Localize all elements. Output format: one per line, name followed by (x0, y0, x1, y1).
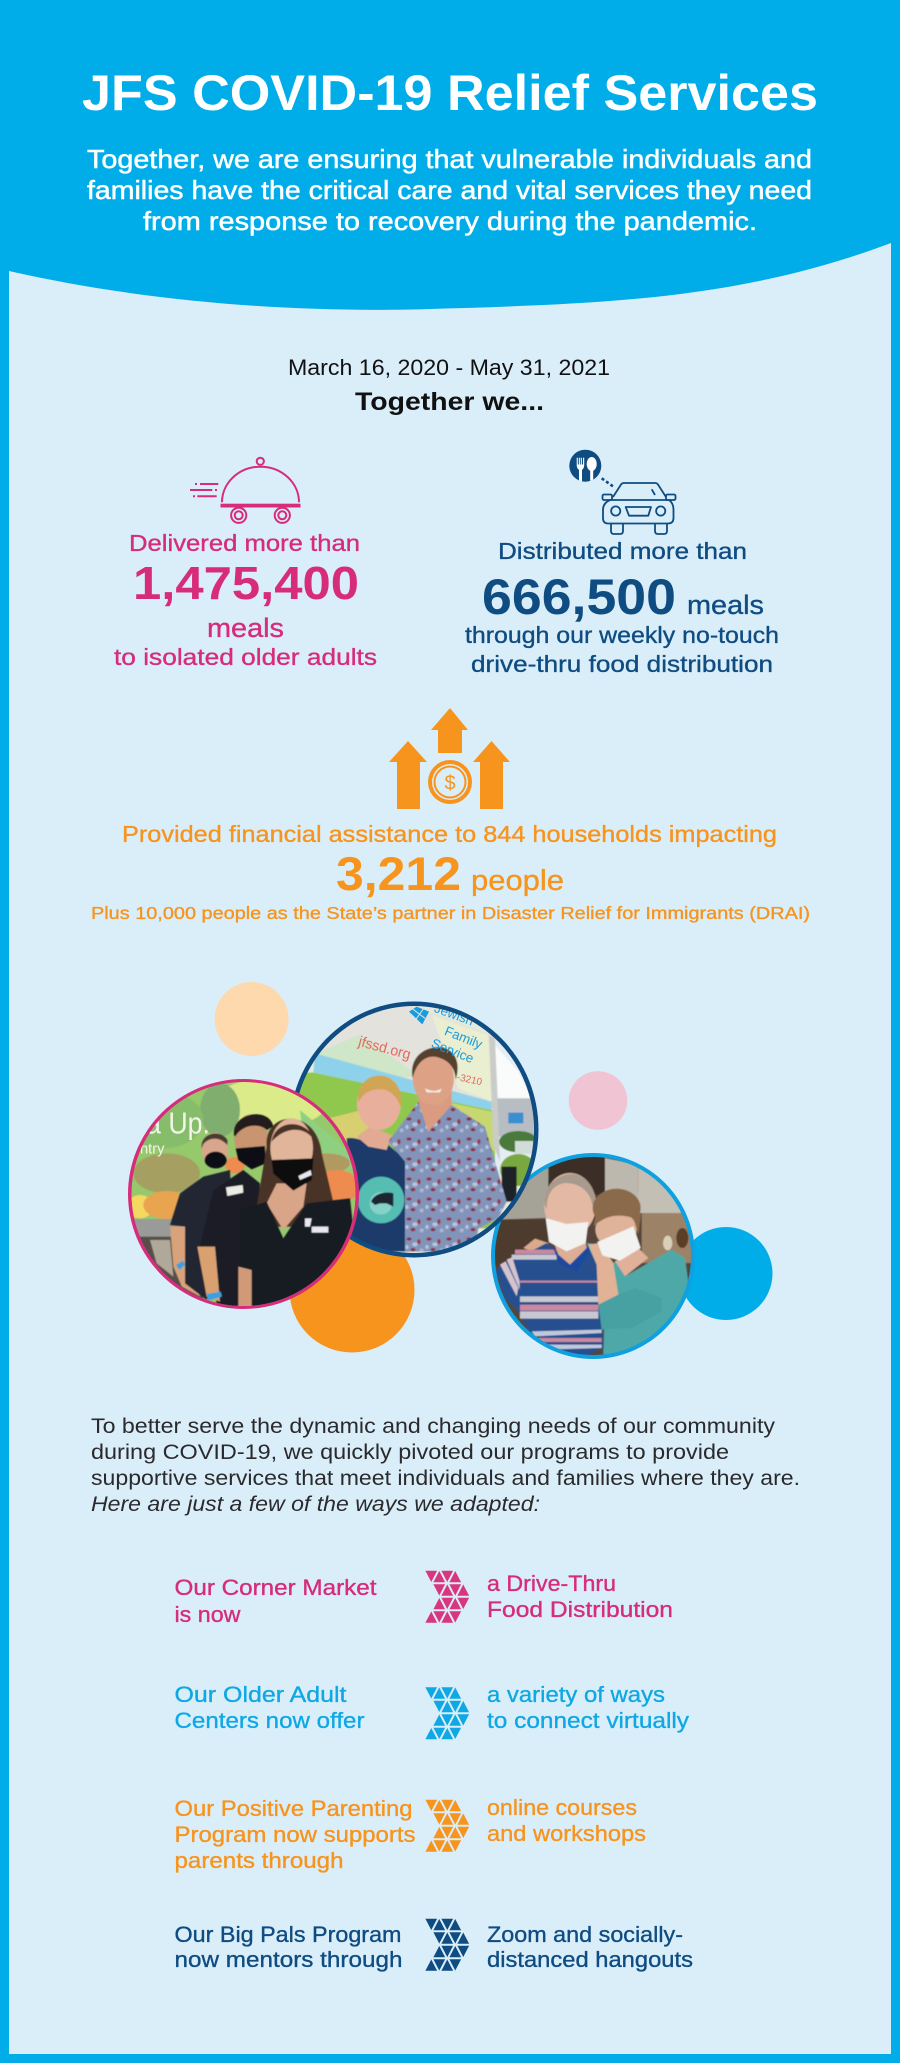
photo: boy and man at sign: Family (443, 1023, 485, 1052)
row: corner market: is now (174, 1602, 241, 1627)
icon: delivery cloche on wheels (190, 458, 300, 523)
row: positive parenting (174, 1795, 646, 1873)
decorative circle: pink (569, 1071, 627, 1130)
photo: boy and man at sign (295, 1002, 538, 1258)
stat: delivered meals (114, 530, 377, 670)
row: big pals (174, 1918, 693, 1972)
row: corner market: a Drive-Thru (487, 1571, 616, 1596)
row: corner market: Food Distribution (487, 1597, 673, 1622)
row: older adult centers: a variety of ways (487, 1682, 665, 1707)
stat: distributed meals: 666,500 (482, 569, 676, 625)
paragraph: adapting programs: To better serve the dynamic and changing needs of our community (91, 1415, 776, 1438)
stat: distributed meals: through our weekly no-touch (465, 622, 779, 648)
row: positive parenting: Program now supports (174, 1822, 416, 1847)
row: positive parenting: online courses (487, 1795, 637, 1820)
paragraph: adapting programs (91, 1415, 800, 1516)
row: older adult centers: Our Older Adult (174, 1682, 346, 1707)
title: JFS COVID-19 Relief Services (82, 65, 818, 121)
row: positive parenting: parents through (174, 1848, 344, 1873)
stat: distributed meals: meals (687, 590, 764, 620)
intro text: families have the critical care and vital services they need (87, 175, 812, 205)
row: positive parenting: and workshops (487, 1821, 646, 1846)
stat: financial assistance: Provided financial assistance to 844 households impacting (122, 821, 777, 847)
stat: financial assistance: 3,212 (336, 847, 461, 900)
date range: March 16, 2020 - May 31, 2021 (288, 355, 610, 380)
decorative circle: blue (680, 1227, 772, 1320)
row: older adult centers: Centers now offer (174, 1708, 364, 1733)
icon: arrows and dollar coin: $ (444, 772, 456, 794)
subheading: Together we... (355, 388, 544, 416)
row: older adult centers (174, 1682, 689, 1740)
stat: financial assistance (91, 821, 810, 923)
stat: distributed meals: Distributed more than (498, 538, 747, 564)
photo: staff in black masks: a Up. (146, 1106, 210, 1140)
row: big pals: distanced hangouts (487, 1947, 693, 1972)
stat: financial assistance: Plus 10,000 people as the State’s partner in Disaster Relief for Immigrants (DRAI) (91, 903, 810, 923)
stat: delivered meals: 1,475,400 (133, 557, 359, 609)
intro text: Together, we are ensuring that vulnerable individuals and (87, 144, 812, 174)
intro text (87, 144, 812, 236)
photo: boy and man at sign: jfssd.org (356, 1034, 412, 1063)
stat: distributed meals (465, 538, 779, 677)
row: older adult centers: to connect virtually (487, 1708, 689, 1733)
decorative circle: orange (290, 1228, 414, 1352)
paragraph: adapting programs: supportive services that meet individuals and families where they are. (91, 1467, 800, 1490)
icon: arrows and dollar coin (389, 708, 510, 809)
row: corner market (174, 1570, 673, 1627)
paragraph: adapting programs: during COVID-19, we quickly pivoted our programs to provide (91, 1441, 729, 1464)
stat: delivered meals: meals (207, 613, 284, 643)
row: corner market: Our Corner Market (174, 1575, 376, 1600)
row: positive parenting: Our Positive Parenting (174, 1796, 412, 1821)
photo: older couple wearing masks (491, 1153, 695, 1359)
photo: boy and man at sign: Jewish (432, 1000, 476, 1028)
photo: boy and man at sign: Service (429, 1036, 476, 1066)
stat: delivered meals: Delivered more than (129, 530, 360, 556)
photo: boy and man at sign: -3210 (456, 1072, 483, 1088)
row: big pals: now mentors through (174, 1947, 402, 1972)
paragraph: adapting programs: Here are just a few of the ways we adapted: (91, 1493, 540, 1516)
decorative circle: peach (215, 982, 289, 1056)
intro text: from response to recovery during the pandemic. (143, 206, 757, 236)
row: big pals: Zoom and socially- (487, 1922, 683, 1947)
stat: financial assistance: people (471, 865, 564, 897)
photo: staff in black masks: ntry (140, 1141, 165, 1157)
stat: delivered meals: to isolated older adults (114, 644, 377, 670)
photo: staff in black masks (128, 1079, 359, 1309)
row: big pals: Our Big Pals Program (174, 1922, 402, 1947)
icon: car with fork and spoon bubble (569, 450, 676, 534)
stat: distributed meals: drive-thru food distribution (471, 651, 773, 677)
